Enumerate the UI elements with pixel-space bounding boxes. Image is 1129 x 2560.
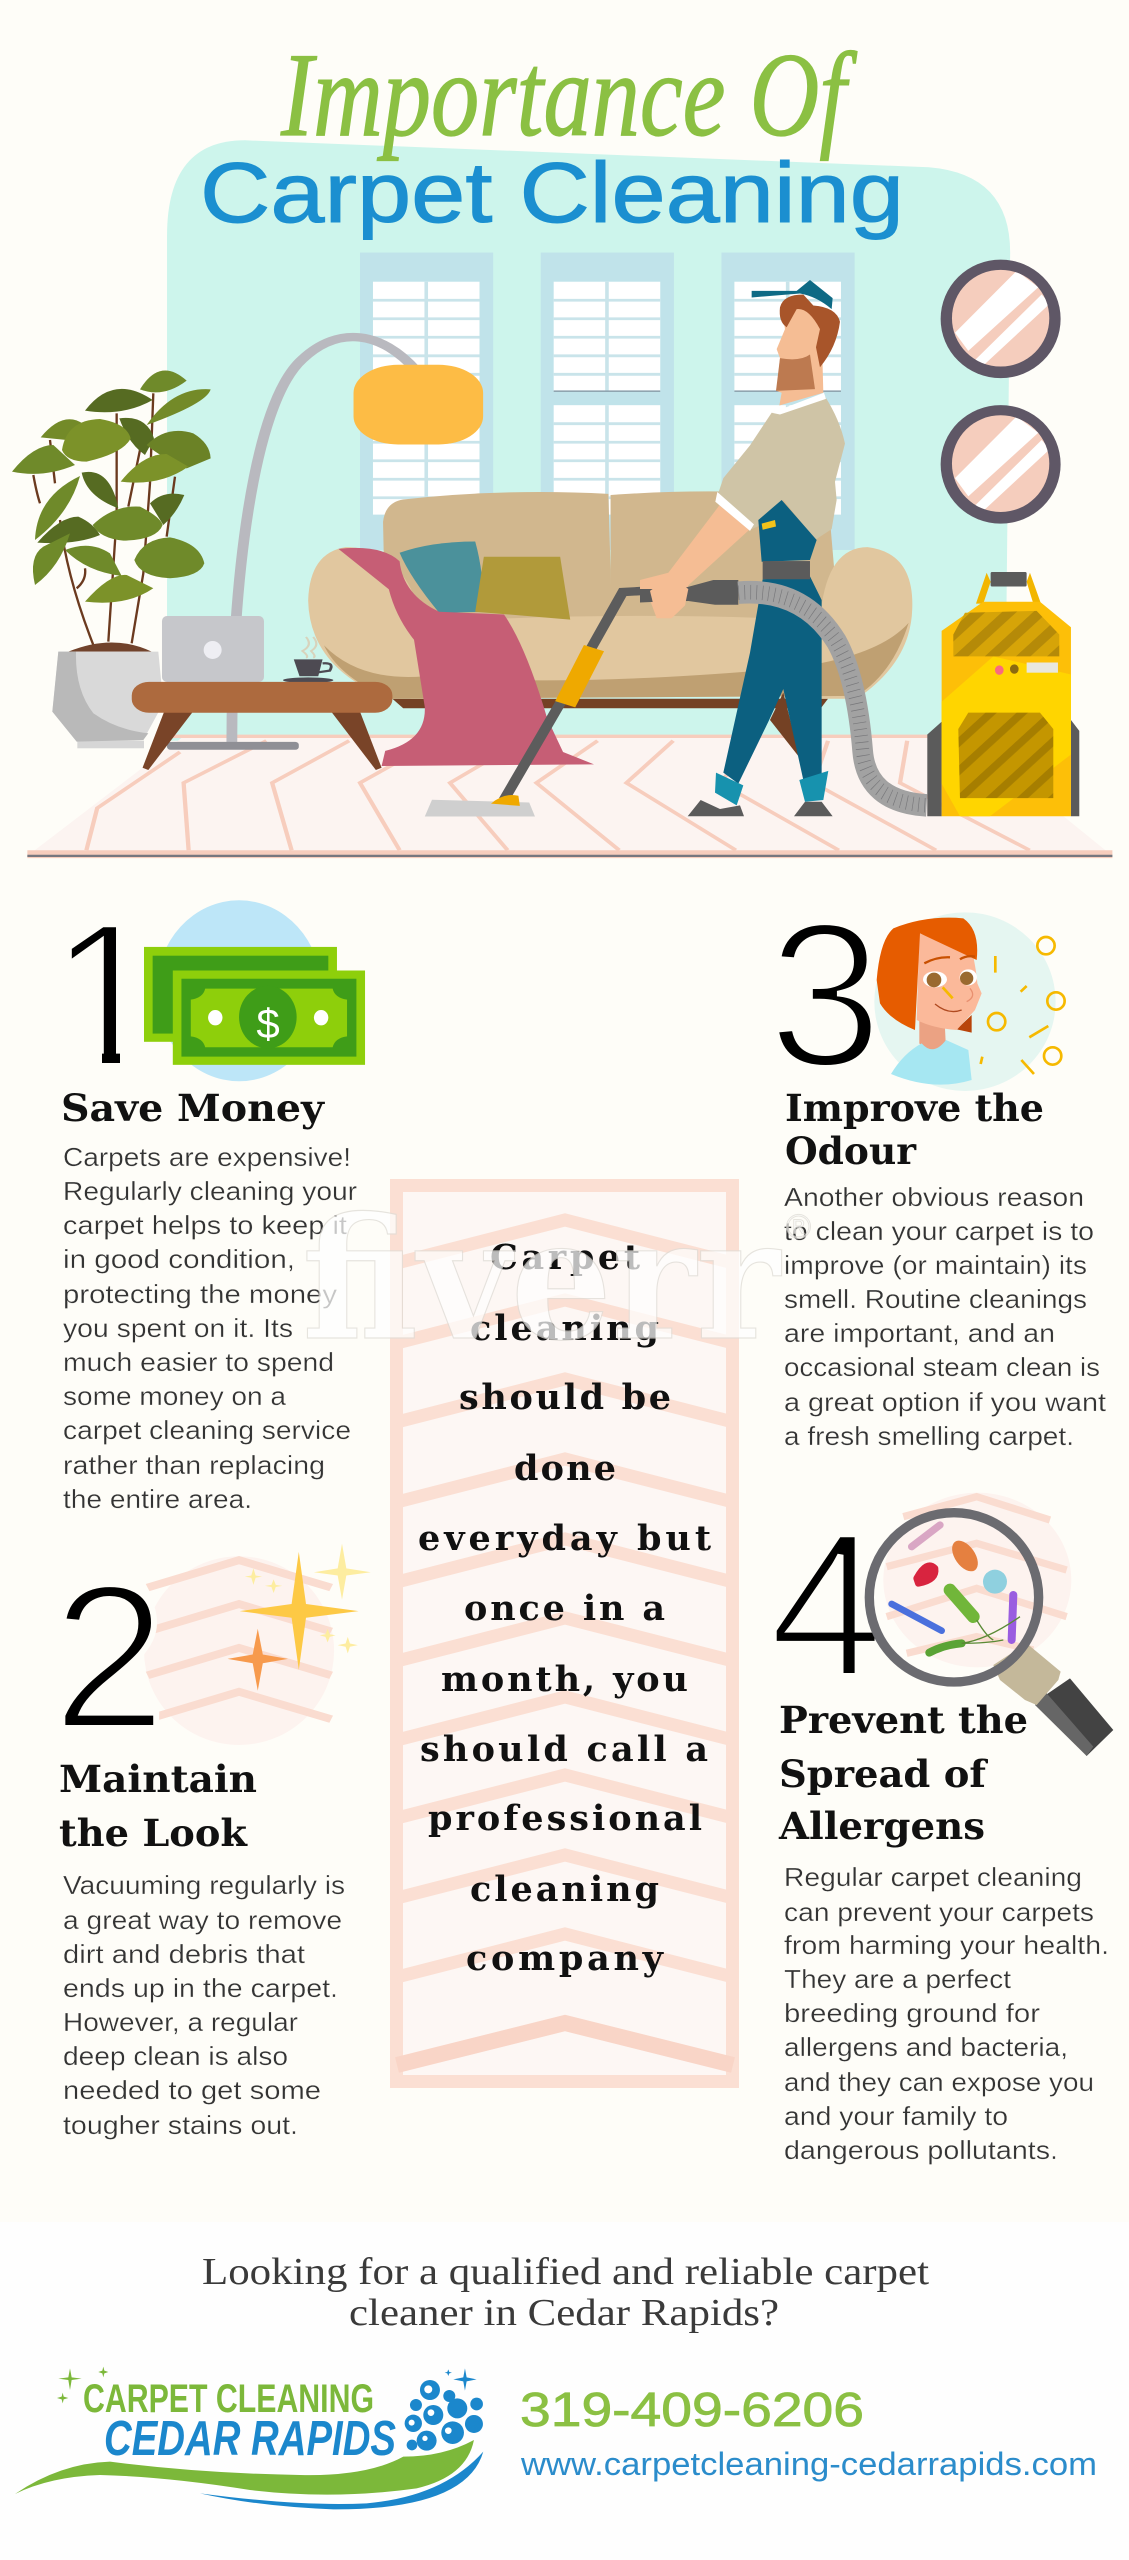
heading: Maintain the Look: Maintain bbox=[59, 1757, 257, 1801]
callout text: cleaning bbox=[470, 1308, 659, 1349]
callout text: Carpet bbox=[490, 1237, 640, 1278]
number 2: 2 bbox=[52, 1542, 167, 1772]
germs bbox=[912, 1525, 940, 1547]
heading: Improve the Odour: Improve the bbox=[785, 1086, 1044, 1130]
lower vent bbox=[958, 713, 1053, 798]
sparkles bbox=[57, 2367, 108, 2403]
text block: improve the odour: smell. Routine cleanings bbox=[784, 1284, 1087, 1314]
text block: maintain the look: ends up in the carpet. bbox=[63, 1973, 338, 2003]
text block: improve the odour bbox=[784, 1182, 1107, 1451]
table and cup bbox=[132, 637, 392, 770]
callout text: cleaning bbox=[470, 1869, 659, 1910]
text block: maintain the look: a great way to remove bbox=[63, 1905, 342, 1935]
callout text: company bbox=[466, 1938, 665, 1979]
callout text: should be bbox=[459, 1377, 671, 1418]
text block: save money: some money on a bbox=[63, 1381, 287, 1411]
text block: prevent allergens: Regular carpet cleaning bbox=[784, 1862, 1082, 1892]
hair bbox=[780, 295, 840, 367]
room wall bbox=[167, 140, 1010, 741]
call to action text: cleaner in Cedar Rapids? bbox=[349, 2292, 779, 2334]
laptop bbox=[162, 616, 264, 682]
callout text: professional bbox=[428, 1798, 702, 1839]
text block: improve the odour: are important, and an bbox=[784, 1318, 1055, 1348]
text block: prevent allergens: dangerous pollutants. bbox=[784, 2135, 1058, 2165]
upper vent bbox=[953, 611, 1059, 656]
rug bbox=[27, 736, 1112, 856]
text block: save money: carpet cleaning service bbox=[63, 1415, 351, 1445]
heading: Maintain the Look: the Look bbox=[59, 1811, 248, 1855]
windows with shutters bbox=[360, 253, 855, 550]
soil bbox=[68, 642, 152, 652]
callout text: done bbox=[514, 1448, 616, 1489]
text block: save money: you spent on it. Its bbox=[63, 1313, 293, 1343]
floor lamp bbox=[167, 337, 483, 750]
number 3: 3 bbox=[768, 880, 883, 1110]
callout text: month, you bbox=[441, 1659, 688, 1700]
callout text: should call a bbox=[420, 1729, 708, 1770]
text block: maintain the look: However, a regular bbox=[63, 2007, 298, 2037]
mirror two bbox=[941, 405, 1061, 524]
lens ring bbox=[869, 1513, 1039, 1682]
text block: prevent allergens: and they can expose you bbox=[784, 2067, 1094, 2097]
text block: prevent allergens: allergens and bacteria, bbox=[784, 2032, 1068, 2062]
handle bbox=[1043, 1678, 1113, 1756]
text block: improve the odour: Another obvious reason bbox=[784, 1182, 1084, 1212]
title: Carpet Cleaning: Carpet Cleaning bbox=[200, 146, 904, 241]
text block: prevent allergens: and your family to bbox=[784, 2101, 1008, 2131]
text block: improve the odour: a great option if you want bbox=[784, 1387, 1107, 1417]
text block: improve the odour: to clean your carpet is to bbox=[784, 1216, 1094, 1246]
number 1: 1 bbox=[49, 880, 164, 1110]
hand bbox=[650, 576, 688, 618]
shirt bbox=[716, 396, 845, 540]
text block: prevent allergens: can prevent your carpets bbox=[784, 1897, 1094, 1927]
handle bbox=[976, 573, 1041, 604]
callout text bbox=[418, 1237, 711, 1979]
text block: prevent allergens: They are a perfect bbox=[784, 1964, 1012, 1994]
text block: save money: protecting the money bbox=[63, 1279, 337, 1309]
body bbox=[942, 602, 1071, 816]
vacuum machine bbox=[927, 572, 1079, 816]
logo line one: CARPET CLEANING bbox=[83, 2377, 374, 2421]
leaves bbox=[12, 370, 211, 603]
vacuum nozzle bbox=[640, 580, 738, 605]
text block: improve the odour: a fresh smelling carpet. bbox=[784, 1421, 1074, 1451]
icon: money on blue circle bbox=[144, 900, 365, 1081]
heading: Maintain the Look bbox=[59, 1757, 257, 1855]
website url: www.carpetcleaning-cedarrapids.com bbox=[520, 2446, 1097, 2482]
text block: maintain the look: deep clean is also bbox=[63, 2041, 288, 2071]
text block: save money: carpet helps to keep it bbox=[63, 1210, 348, 1240]
shoes bbox=[688, 800, 833, 816]
cap bbox=[752, 280, 833, 309]
text block: save money: rather than replacing bbox=[63, 1450, 325, 1480]
icon: sparkles on pale chevrons bbox=[144, 1544, 371, 1745]
text block: maintain the look: dirt and debris that bbox=[63, 1939, 306, 1969]
title: Importance Of: Importance Of bbox=[280, 28, 858, 161]
heading: Prevent the Spread of Allergens: Spread of bbox=[779, 1752, 988, 1796]
cleaner man bbox=[640, 280, 927, 816]
pocket tag bbox=[762, 520, 776, 530]
call to action text bbox=[202, 2251, 929, 2334]
text block: save money: Carpets are expensive! bbox=[63, 1142, 351, 1172]
number 4: 4 bbox=[769, 1490, 884, 1720]
text block: maintain the look: tougher stains out. bbox=[63, 2110, 298, 2140]
text block: prevent allergens bbox=[784, 1862, 1109, 2165]
heading: Improve the Odour: Odour bbox=[785, 1129, 917, 1173]
arm bbox=[640, 505, 750, 618]
plant bbox=[12, 370, 264, 748]
call to action text: Looking for a qualified and reliable carpet bbox=[202, 2251, 929, 2293]
text block: save money: the entire area. bbox=[63, 1484, 252, 1514]
text block: maintain the look: Vacuuming regularly is bbox=[63, 1870, 345, 1900]
sofa leg behind legs bbox=[770, 693, 800, 758]
indicators bbox=[995, 665, 1004, 675]
logo: Carpet Cleaning Cedar Rapids bbox=[15, 2367, 483, 2509]
sofa bbox=[308, 491, 912, 708]
shirt cuff bbox=[715, 492, 754, 531]
phone number: 319-409-6206 bbox=[520, 2384, 864, 2437]
stems bbox=[33, 393, 175, 645]
text block: improve the odour: occasional steam clean is bbox=[784, 1352, 1100, 1382]
cushions bbox=[400, 542, 570, 620]
watermark: fiverr: ® bbox=[786, 1208, 811, 1246]
neck and face bbox=[777, 300, 823, 405]
text block: maintain the look: needed to get some bbox=[63, 2075, 321, 2105]
hero illustration: living room bbox=[27, 140, 1112, 856]
heading: Save Money: Save Money bbox=[61, 1086, 326, 1130]
belt bbox=[763, 561, 810, 579]
text block: prevent allergens: breeding ground for bbox=[784, 1998, 1040, 2028]
collar bbox=[772, 393, 826, 415]
coffee cup bbox=[283, 637, 333, 683]
wall mirrors bbox=[941, 260, 1061, 524]
icon: woman smelling fresh air bbox=[874, 912, 1065, 1091]
bubbles bbox=[405, 2380, 483, 2451]
text block: maintain the look bbox=[63, 1870, 345, 2140]
overalls bib bbox=[758, 500, 817, 562]
text block: save money: in good condition, bbox=[63, 1244, 295, 1274]
text block: improve the odour: improve (or maintain) its bbox=[784, 1250, 1087, 1280]
heading: Prevent the Spread of Allergens: Prevent the bbox=[779, 1698, 1028, 1742]
text block: save money bbox=[63, 1142, 357, 1514]
pot bbox=[52, 652, 163, 748]
wheels and side panels bbox=[927, 720, 1079, 816]
text block: save money: much easier to spend bbox=[63, 1347, 334, 1377]
overalls bbox=[723, 576, 822, 784]
beard bbox=[776, 355, 815, 391]
vacuum wand bbox=[425, 590, 652, 817]
text block: save money: Regularly cleaning your bbox=[63, 1176, 357, 1206]
coffee table bbox=[132, 682, 392, 770]
watermark: fiverr: fiverr bbox=[302, 1180, 782, 1378]
panel: centre callout with chevrons bbox=[396, 1186, 733, 2082]
callout text: everyday but bbox=[418, 1518, 711, 1559]
hose bbox=[738, 592, 927, 805]
dollar sign: $ bbox=[256, 1000, 280, 1047]
logo line two: CEDAR RAPIDS bbox=[104, 2412, 396, 2466]
heading: Improve the Odour bbox=[785, 1086, 1044, 1173]
logo swoosh bbox=[15, 2367, 483, 2509]
heading: Prevent the Spread of Allergens: Allergens bbox=[778, 1804, 985, 1848]
callout text: once in a bbox=[464, 1588, 665, 1629]
mirror one bbox=[941, 260, 1061, 378]
boots bbox=[715, 771, 828, 805]
heading: Prevent the Spread of Allergens bbox=[778, 1698, 1028, 1848]
text block: prevent allergens: from harming your health. bbox=[784, 1930, 1109, 1960]
icon: magnifying glass with germs bbox=[869, 1493, 1113, 1756]
pink blanket bbox=[338, 548, 594, 766]
